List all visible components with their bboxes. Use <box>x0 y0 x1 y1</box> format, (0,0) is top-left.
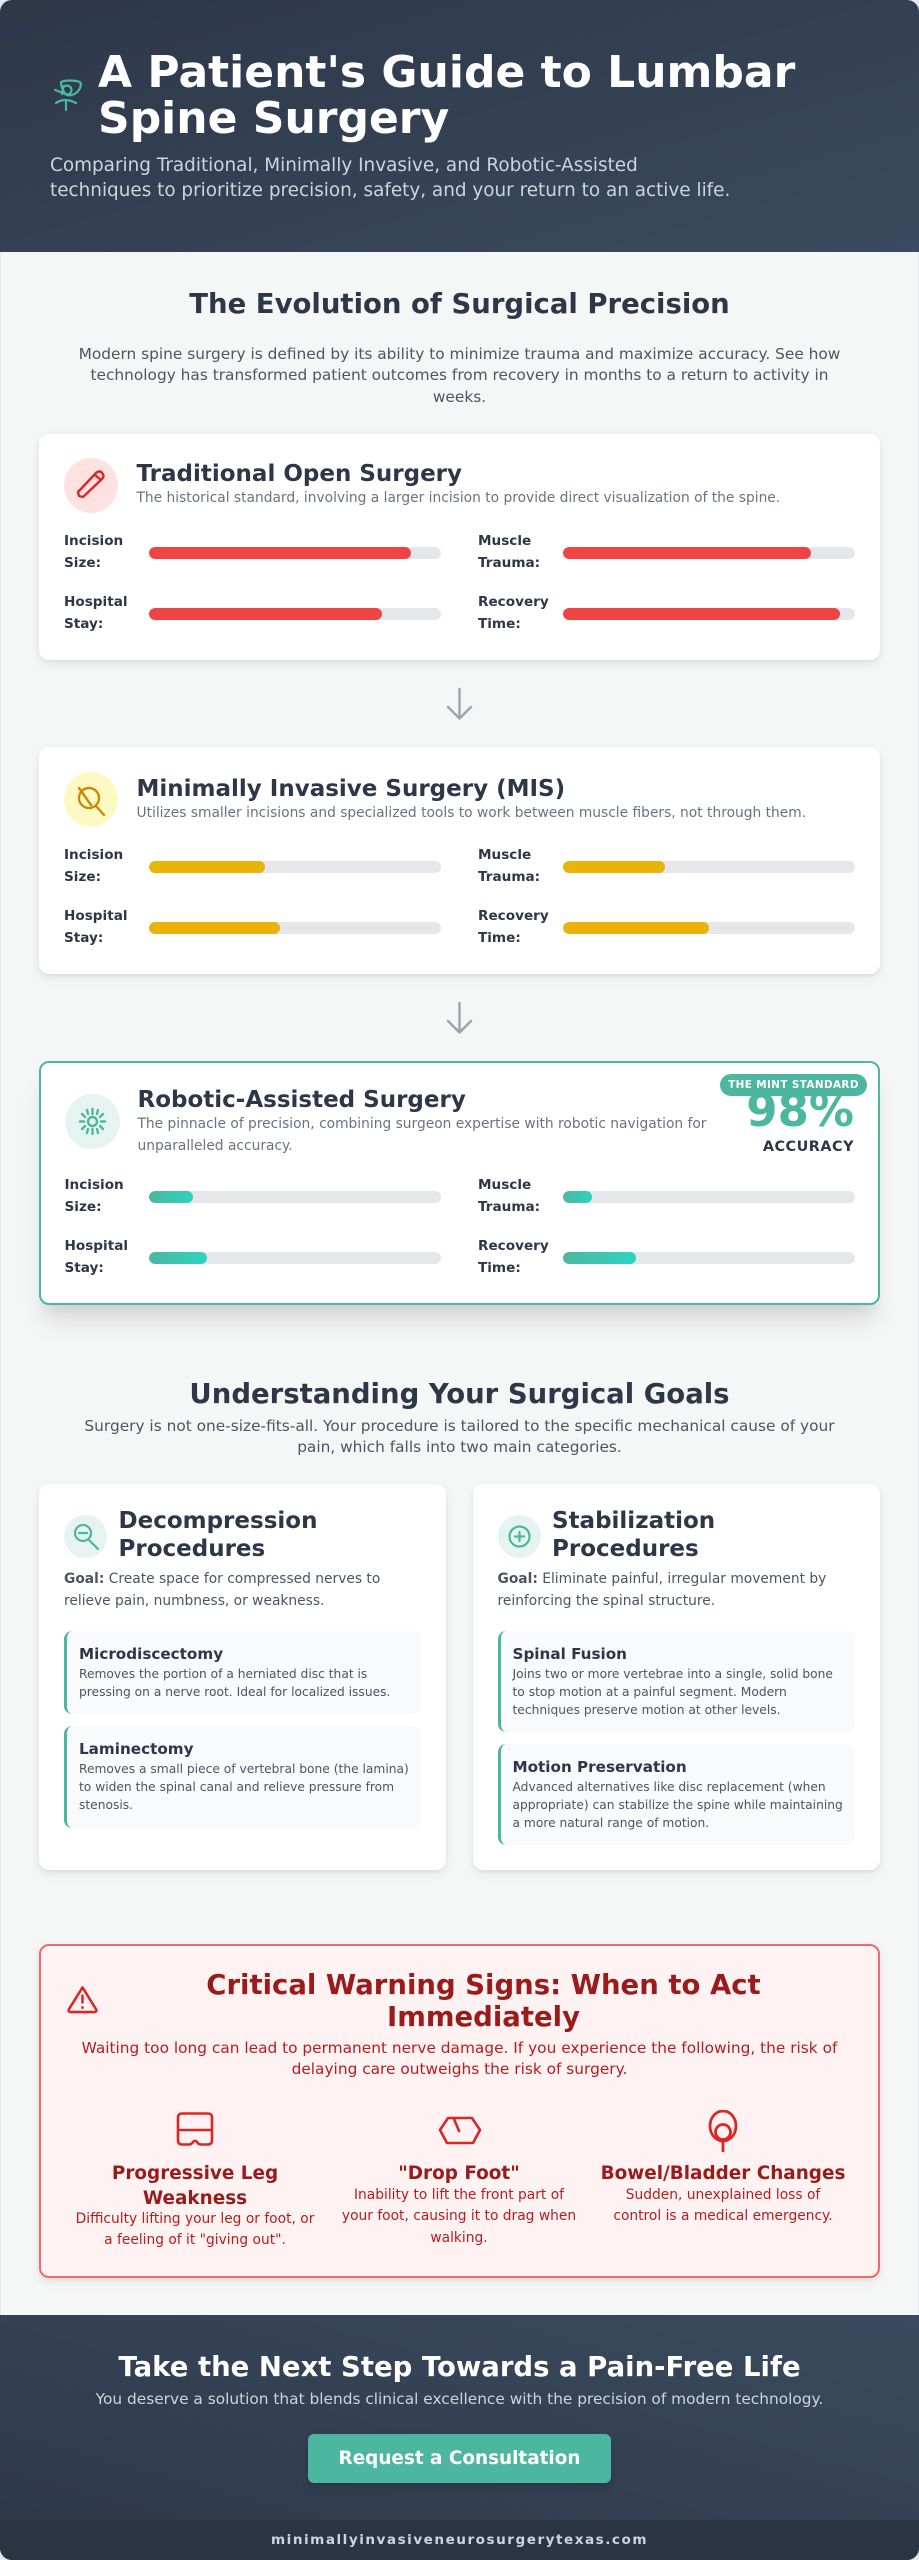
arrow: MIS to robotic <box>446 1002 472 1034</box>
card description: The pinnacle of precision, combining surgeon expertise with robotic navigation for <box>138 1116 706 1132</box>
icon: foot <box>438 2116 482 2144</box>
sign description <box>342 2187 576 2246</box>
warning title: Immediately <box>387 2001 580 2033</box>
icon: scalpel <box>64 458 118 513</box>
warning title: Critical Warning Signs: When to Act <box>206 1969 761 2001</box>
badge: the mint standard: THE MINT STANDARD <box>728 1079 859 1091</box>
icon: warning triangle <box>67 1986 98 2014</box>
item description: appropriate) can stabilize the spine while maintaining <box>512 1798 843 1812</box>
item description <box>79 1666 390 1699</box>
item: spinal fusion <box>498 1631 854 1732</box>
button: request a consultation <box>308 2434 611 2483</box>
section intro paragraph <box>84 1417 835 1456</box>
sign title: Weakness <box>143 2188 247 2209</box>
sign description: control is a medical emergency. <box>613 2208 833 2224</box>
metric: muscle trauma: Trauma: <box>478 869 540 885</box>
icon: bladder <box>707 2110 739 2152</box>
sign description: your foot, causing it to drag when <box>342 2208 576 2224</box>
heading: evolution of surgical precision: The Evolution of Surgical Precision <box>189 288 730 320</box>
intro paragraph: weeks. <box>433 388 486 406</box>
metric: incision size <box>64 533 441 571</box>
card title: Procedures <box>552 1536 699 1562</box>
goal text: Goal: Eliminate painful, irregular movement by <box>498 1571 826 1587</box>
metric: incision size: Size: <box>64 555 101 571</box>
intro paragraph: Modern spine surgery is defined by its ability to minimize trauma and maximize accuracy. See how <box>79 345 840 363</box>
item description: stenosis. <box>79 1798 133 1812</box>
icon: leg <box>176 2112 214 2146</box>
item description <box>79 1762 409 1812</box>
footer strip: website <box>0 2520 919 2560</box>
title <box>98 47 796 144</box>
metric: hospital stay <box>64 908 441 946</box>
footer strip: website: minimallyinvasiveneurosurgerytexas.com <box>271 2532 648 2548</box>
sign title: Progressive Leg <box>112 2163 278 2184</box>
button: request a consultation: Request a Consultation <box>339 2448 580 2469</box>
stat: 98% accuracy <box>746 1084 854 1155</box>
sign: progressive leg weakness <box>76 2112 314 2248</box>
metric: muscle trauma: Trauma: <box>478 555 540 571</box>
card title: Procedures <box>118 1536 265 1562</box>
metric: recovery time: Time: <box>478 930 521 946</box>
card description <box>137 1116 706 1154</box>
panel: robotic-assisted surgery <box>39 1061 880 1305</box>
subtitle: techniques to prioritize precision, safety, and your return to an active life. <box>50 180 730 201</box>
footer text: You deserve a solution that blends clinical excellence with the precision of modern technology. <box>96 2390 823 2408</box>
card title: Decompression <box>118 1508 317 1534</box>
icon: robotic target <box>64 1094 120 1149</box>
metric: incision size: Incision <box>64 533 123 549</box>
arrow: traditional to MIS <box>446 688 472 720</box>
panel: stabilization procedures <box>472 1484 880 1870</box>
heading: understanding your surgical goals: Understanding Your Surgical Goals <box>189 1378 730 1410</box>
goal text: Goal: Create space for compressed nerves to <box>64 1571 380 1587</box>
footer heading: Take the Next Step Towards a Pain-Free Life <box>118 2351 801 2383</box>
icon: spine logo <box>54 79 82 112</box>
intro paragraph: technology has transformed patient outcomes from recovery in months to a return to activity in <box>90 366 828 384</box>
warning title <box>206 1969 761 2033</box>
sign description: walking. <box>430 2230 488 2246</box>
metric: hospital stay: Stay: <box>64 930 103 946</box>
icon: magnifier minus <box>64 1515 107 1558</box>
intro paragraph <box>79 345 840 406</box>
card description: Utilizes smaller incisions and specialized tools to work between muscle fibers, not through them. <box>136 805 806 821</box>
icon: circle plus <box>498 1515 540 1558</box>
metric: recovery time <box>478 908 855 946</box>
item description <box>512 1666 833 1717</box>
icon: magnifier <box>64 772 118 827</box>
sign description: Sudden, unexplained loss of <box>626 2187 820 2203</box>
item description: Removes the portion of a herniated disc that is <box>79 1666 367 1680</box>
metric: recovery time: Time: <box>478 616 521 632</box>
warning paragraph: delaying care outweighs the risk of surgery. <box>292 2060 627 2078</box>
goal text: reinforcing the spinal structure. <box>498 1593 715 1609</box>
sign description <box>591 2185 855 2228</box>
sign: bowel/bladder changes <box>601 2110 845 2224</box>
item title: Spinal Fusion <box>512 1645 627 1663</box>
sign description <box>76 2211 314 2248</box>
panel: critical warning signs <box>39 1944 880 2278</box>
sign description: a feeling of it "giving out". <box>104 2232 286 2248</box>
title: Spine Surgery <box>98 93 449 144</box>
item description: Joins two or more vertebrae into a single, solid bone <box>512 1666 833 1680</box>
item title: Laminectomy <box>79 1740 194 1758</box>
card description: unparalleled accuracy. <box>138 1138 293 1154</box>
subtitle: Comparing Traditional, Minimally Invasive, and Robotic-Assisted <box>50 155 638 176</box>
metric: hospital stay: Hospital <box>64 1238 128 1254</box>
item description: techniques preserve motion at other levels. <box>512 1703 780 1717</box>
metric: incision size: Size: <box>64 1199 102 1215</box>
metric: hospital stay: Stay: <box>64 1260 104 1276</box>
item title: Motion Preservation <box>512 1758 687 1776</box>
goal text: relieve pain, numbness, or weakness. <box>64 1593 324 1609</box>
stat value: 98% <box>746 1084 854 1137</box>
section intro paragraph: Surgery is not one-size-fits-all. Your procedure is tailored to the specific mechanical cause of your <box>84 1417 835 1435</box>
card title: Traditional Open Surgery <box>136 461 462 487</box>
item: motion preservation <box>498 1744 854 1845</box>
subtitle <box>50 155 730 201</box>
metric: incision size: Incision <box>64 1177 124 1193</box>
card title: Minimally Invasive Surgery (MIS) <box>136 776 565 802</box>
item description <box>512 1780 843 1830</box>
metric: recovery time: Recovery <box>478 594 549 610</box>
metric: muscle trauma: Muscle <box>478 1177 531 1193</box>
sign description: Difficulty lifting your leg or foot, or <box>76 2211 314 2227</box>
metric: incision size: Incision <box>64 847 123 863</box>
sign: drop foot <box>342 2116 576 2246</box>
metric: hospital stay: Hospital <box>64 594 128 610</box>
card description: The historical standard, involving a larger incision to provide direct visualization of the spine. <box>136 490 780 506</box>
metric: muscle trauma: Muscle <box>478 847 531 863</box>
metric: recovery time: Time: <box>478 1260 521 1276</box>
metric: muscle trauma <box>478 1177 855 1215</box>
stat label: ACCURACY <box>763 1139 854 1155</box>
item description: to widen the spinal canal and relieve pressure from <box>79 1780 394 1794</box>
metric: hospital stay: Stay: <box>64 616 103 632</box>
section intro paragraph: pain, which falls into two main categories. <box>297 1438 622 1456</box>
card title <box>552 1508 715 1562</box>
item description: pressing on a nerve root. Ideal for localized issues. <box>79 1685 390 1699</box>
card title: Stabilization <box>552 1508 715 1534</box>
item description: Removes a small piece of vertebral bone (the lamina) <box>79 1762 409 1776</box>
item description: to stop motion at a painful segment. Modern <box>512 1685 787 1699</box>
item: microdiscectomy <box>64 1631 421 1714</box>
item description: Advanced alternatives like disc replacement (when <box>512 1780 826 1794</box>
metric: incision size <box>64 847 441 885</box>
panel: minimally invasive surgery <box>39 747 880 974</box>
metric: incision size: Size: <box>64 869 101 885</box>
sign title: Bowel/Bladder Changes <box>601 2163 845 2184</box>
metric: hospital stay: Hospital <box>64 908 128 924</box>
warning paragraph <box>82 2039 838 2078</box>
item description: a more natural range of motion. <box>512 1816 709 1830</box>
item title: Microdiscectomy <box>79 1645 223 1663</box>
metric: muscle trauma <box>478 847 855 885</box>
metric: recovery time: Recovery <box>478 908 549 924</box>
warning paragraph: Waiting too long can lead to permanent nerve damage. If you experience the following, the risk of <box>82 2039 837 2057</box>
panel: decompression procedures <box>39 1484 446 1870</box>
metric: hospital stay <box>64 1238 441 1276</box>
metric: muscle trauma <box>478 533 855 571</box>
goal text <box>498 1571 826 1609</box>
header banner <box>0 0 919 252</box>
metric: recovery time <box>478 594 855 632</box>
metric: muscle trauma: Muscle <box>478 533 531 549</box>
metric: muscle trauma: Trauma: <box>478 1199 540 1215</box>
sign description: Inability to lift the front part of <box>354 2187 564 2203</box>
metric: incision size <box>64 1177 441 1215</box>
item: laminectomy <box>64 1726 421 1828</box>
sign title: "Drop Foot" <box>398 2163 520 2184</box>
panel: traditional open surgery <box>39 434 880 660</box>
card title: Robotic-Assisted Surgery <box>138 1087 466 1113</box>
metric: recovery time: Recovery <box>478 1238 549 1254</box>
goal text <box>64 1571 380 1609</box>
title: A Patient's Guide to Lumbar <box>98 47 795 98</box>
badge: the mint standard <box>720 1074 867 1096</box>
metric: recovery time <box>478 1238 855 1276</box>
card title <box>118 1508 317 1562</box>
metric: hospital stay <box>64 594 441 632</box>
sign title <box>112 2163 278 2209</box>
panel: call to action footer <box>0 2315 919 2560</box>
